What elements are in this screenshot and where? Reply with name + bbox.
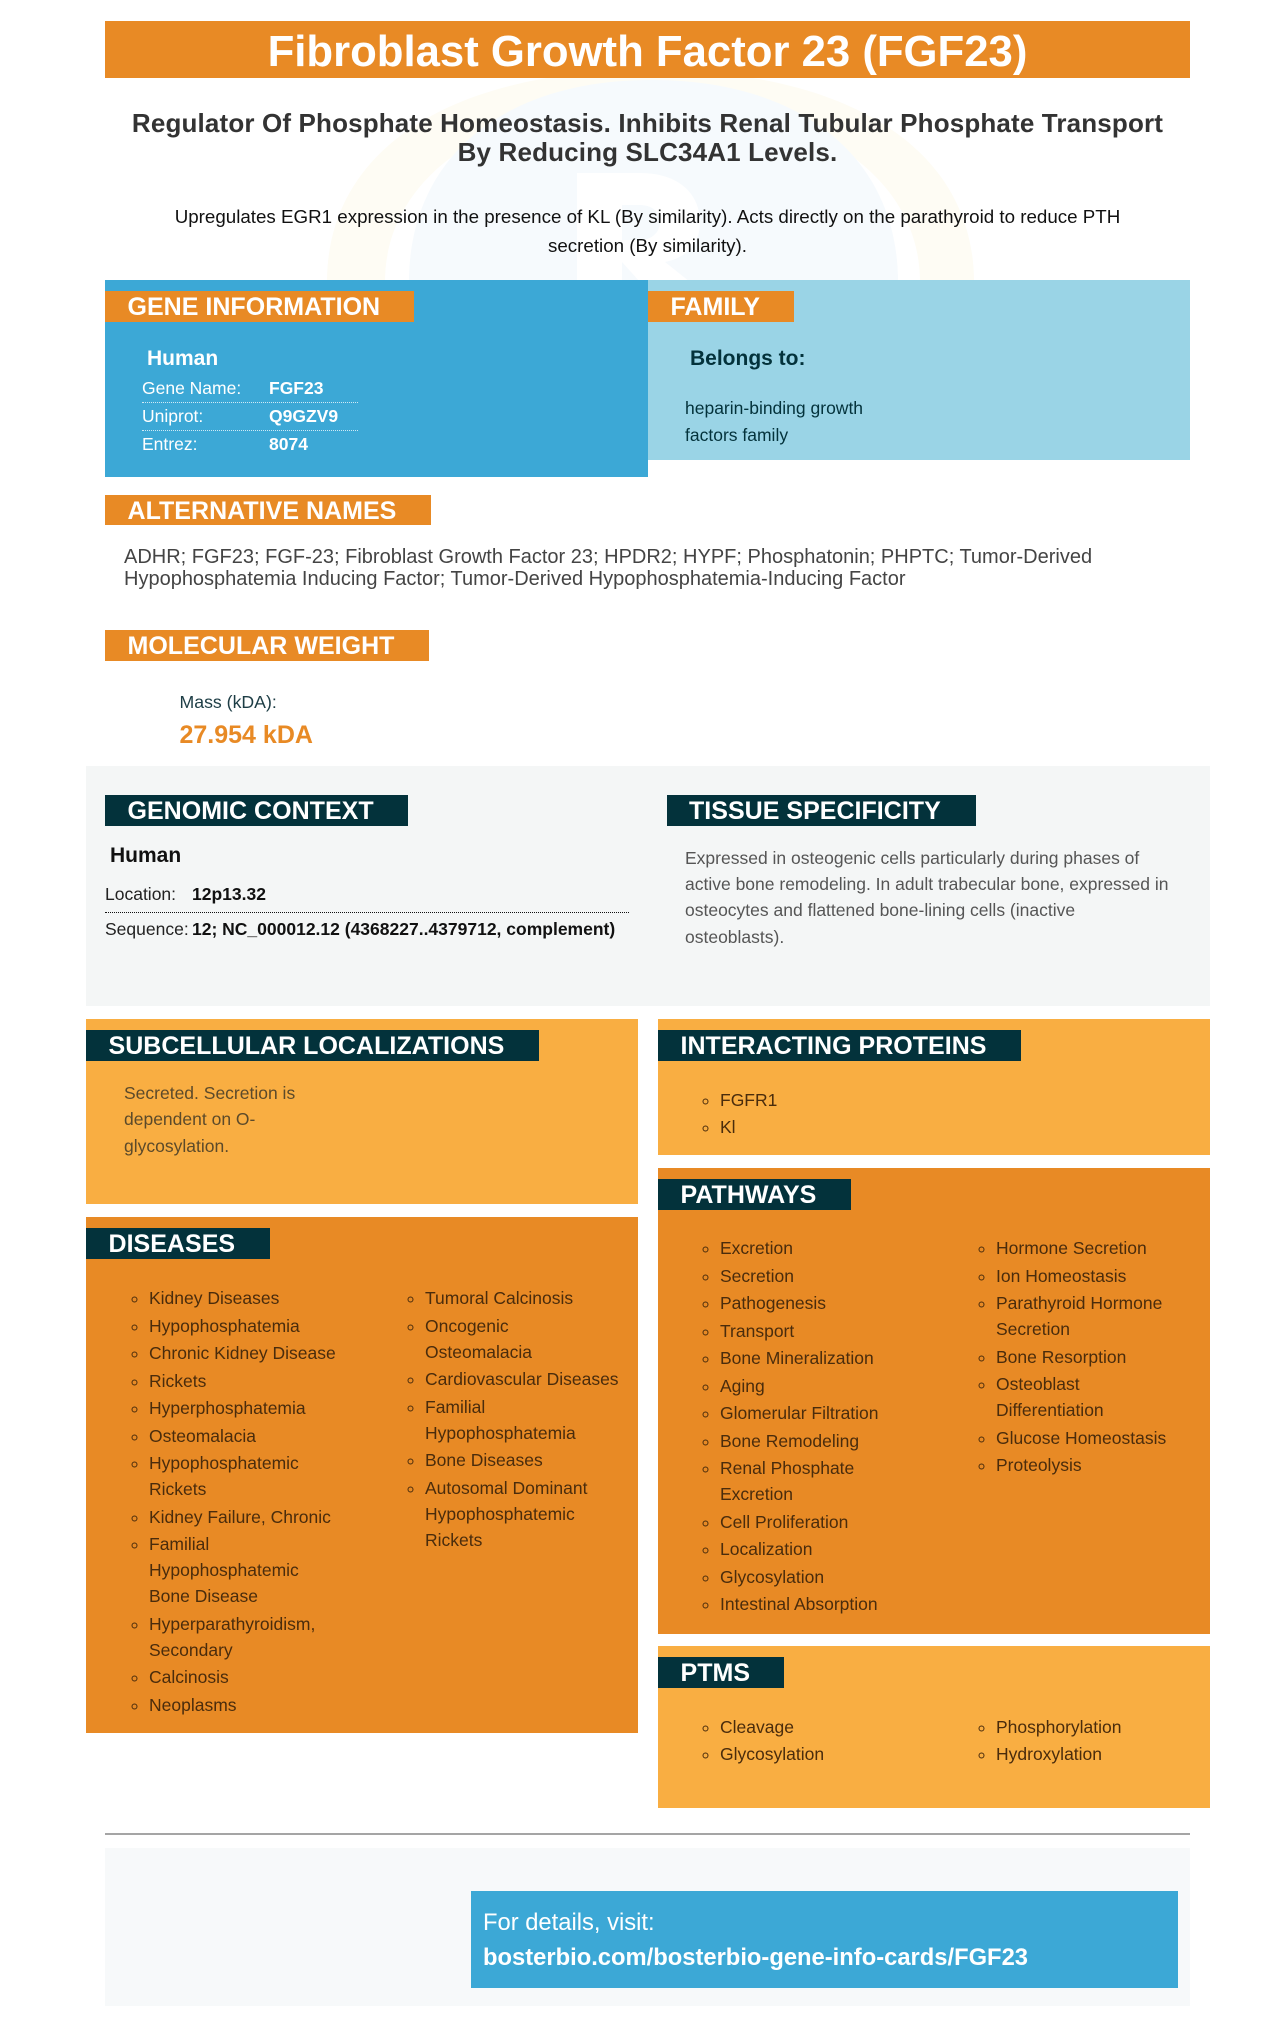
pathway list column 1: Glycosylation [720, 1567, 824, 1587]
entrez row [142, 434, 308, 454]
pathway list column 1: Renal Phosphate [720, 1458, 854, 1478]
disease list column 1: Neoplasms [149, 1694, 237, 1714]
disease list column 1: Kidney Diseases [149, 1288, 279, 1308]
alternative names text: ADHR; FGF23; FGF-23; Fibroblast Growth Factor 23; HPDR2; HYPF; Phosphatonin; PHPTC; Tumor-Derived [124, 546, 1092, 568]
pathway list column 1 [702, 1238, 879, 1614]
sequence row [105, 919, 615, 939]
pathway list column 2: Glucose Homeostasis [996, 1428, 1166, 1448]
protein list: FGFR1 [720, 1090, 777, 1110]
disease list column 2: Familial [425, 1396, 485, 1416]
heading: family: FAMILY [670, 293, 760, 321]
family text: factors family [685, 425, 788, 445]
disease list column 2: Hypophosphatemic [425, 1504, 575, 1524]
disease list column 1: Osteomalacia [149, 1426, 256, 1446]
description: Upregulates EGR1 expression in the presence of KL (By similarity). Acts directly on the parathyroid to reduce PTH [175, 206, 1120, 227]
disease list column 1: Hyperphosphatemia [149, 1398, 306, 1418]
panel: pathways [658, 1168, 1210, 1634]
heading: pathways [658, 1179, 851, 1210]
pathway list column 1: Transport [720, 1321, 794, 1341]
heading: diseases: DISEASES [108, 1230, 235, 1258]
disease list column 2: Osteomalacia [425, 1342, 532, 1362]
description [175, 206, 1120, 256]
title banner [105, 21, 1190, 78]
description: secretion (By similarity). [548, 235, 747, 256]
tissue specificity text: Expressed in osteogenic cells particularly during phases of [685, 848, 1139, 868]
watermark logo [327, 78, 974, 280]
family text [685, 398, 863, 445]
panel: interacting proteins [658, 1019, 1210, 1155]
subtitle: Regulator Of Phosphate Homeostasis. Inhibits Renal Tubular Phosphate Transport [132, 108, 1163, 138]
panel: gene information: 8074 [269, 434, 308, 454]
divider [142, 402, 358, 403]
heading: molecular weight: MOLECULAR WEIGHT [128, 632, 394, 660]
heading: family [648, 291, 794, 322]
call to action box [471, 1891, 1178, 1988]
pathway list column 1: Bone Remodeling [720, 1431, 859, 1451]
gene name row [142, 378, 323, 398]
pathway list column 1: Secretion [720, 1266, 794, 1286]
location row [105, 884, 266, 904]
pathway list column 2: Ion Homeostasis [996, 1266, 1126, 1286]
PTM list column 1: Cleavage [720, 1716, 794, 1736]
panel: diseases [86, 1217, 638, 1733]
disease list column 2: Bone Diseases [425, 1450, 543, 1470]
tissue specificity text [685, 848, 1168, 947]
PTM list column 2 [978, 1716, 1122, 1764]
disease list column 1: Bone Disease [149, 1586, 258, 1606]
tissue specificity text: active bone remodeling. In adult trabecular bone, expressed in [685, 874, 1168, 894]
pathway list column 2: Parathyroid Hormone [996, 1293, 1162, 1313]
mass value: 27.954 kDA [180, 721, 313, 749]
pathway list column 1: Pathogenesis [720, 1293, 826, 1313]
disease list column 1: Kidney Failure, Chronic [149, 1506, 331, 1526]
species label: Human [147, 346, 218, 370]
disease list column 1 [132, 1288, 336, 1714]
disease list column 1: Hypophosphatemic [149, 1560, 299, 1580]
heading: genomic context: GENOMIC CONTEXT [128, 797, 374, 825]
pathway list column 1: Cell Proliferation [720, 1512, 848, 1532]
panel: subcellular localizations [86, 1019, 638, 1204]
disease list column 2: Oncogenic [425, 1316, 509, 1336]
tissue specificity text: osteoblasts). [685, 927, 784, 947]
subcellular text: dependent on O- [124, 1109, 255, 1129]
mass label: Mass (kDA): [180, 692, 277, 712]
family text: heparin-binding growth [685, 398, 863, 418]
disease list column 1: Hypophosphatemia [149, 1316, 300, 1336]
disease list column 1: Secondary [149, 1640, 233, 1660]
entrez row: Entrez: [142, 434, 197, 454]
gene name row: Gene Name: [142, 378, 241, 398]
protein list: Kl [720, 1117, 736, 1137]
pathway list column 2: Bone Resorption [996, 1347, 1126, 1367]
pathway list column 2: Proteolysis [996, 1455, 1082, 1475]
PTM list column 1: Glycosylation [720, 1744, 824, 1764]
heading: alternative names: ALTERNATIVE NAMES [128, 497, 396, 525]
panel: family [648, 280, 1190, 460]
panel: gene information: FGF23 [269, 378, 323, 398]
protein list [702, 1090, 777, 1137]
subcellular text [124, 1082, 295, 1156]
disease list column 1: Calcinosis [149, 1667, 229, 1687]
pathway list column 1: Excretion [720, 1238, 793, 1258]
panel: gene information: Q9GZV9 [269, 406, 338, 426]
heading: interacting proteins: INTERACTING PROTEINS [680, 1032, 986, 1060]
pathway list column 1: Bone Mineralization [720, 1348, 874, 1368]
pathway list column 2: Osteoblast [996, 1374, 1080, 1394]
disease list column 2: Hypophosphatemia [425, 1422, 576, 1442]
heading: PTMs [658, 1657, 784, 1688]
disease list column 2 [408, 1288, 619, 1550]
subcellular text: Secreted. Secretion is [124, 1082, 295, 1102]
divider [142, 430, 358, 431]
location row: Location: [105, 884, 176, 904]
details link: bosterbio.com/bosterbio-gene-info-cards/FGF23 [483, 1944, 1028, 1971]
uniprot row: Uniprot: [142, 406, 203, 426]
heading: gene information: GENE INFORMATION [128, 293, 380, 321]
subtitle: By Reducing SLC34A1 Levels. [458, 137, 837, 167]
panel: gene information [105, 280, 648, 477]
pathway list column 1: Localization [720, 1539, 812, 1559]
tissue specificity text: osteocytes and flattened bone-lining cells (inactive [685, 900, 1075, 920]
disease list column 1: Chronic Kidney Disease [149, 1343, 336, 1363]
heading: subcellular localizations: SUBCELLULAR LOCALIZATIONS [108, 1032, 504, 1060]
panel: footer [105, 1848, 1190, 2006]
uniprot row [142, 406, 338, 426]
PTM list column 2: Phosphorylation [996, 1716, 1122, 1736]
panel: PTMs [658, 1646, 1210, 1808]
disease list column 1: Rickets [149, 1370, 206, 1390]
pathway list column 2: Differentiation [996, 1400, 1104, 1420]
subcellular text: glycosylation. [124, 1136, 229, 1156]
disease list column 1: Familial [149, 1534, 209, 1554]
details label: For details, visit: [483, 1909, 655, 1936]
disease list column 1: Hypophosphatemic [149, 1453, 299, 1473]
pathway list column 1: Glomerular Filtration [720, 1403, 879, 1423]
panel: genomic context and tissue specificity: 12; NC_000012.12 (4368227..4379712, complement) [192, 919, 615, 939]
heading: pathways: PATHWAYS [680, 1181, 816, 1209]
pathway list column 1: Aging [720, 1376, 765, 1396]
PTM list column 2: Hydroxylation [996, 1744, 1102, 1764]
disease list column 2: Tumoral Calcinosis [425, 1288, 573, 1308]
pathway list column 2: Secretion [996, 1319, 1070, 1339]
divider [105, 912, 629, 913]
pathway list column 1: Intestinal Absorption [720, 1594, 878, 1614]
pathway list column 2 [978, 1238, 1166, 1475]
disease list column 2: Cardiovascular Diseases [425, 1369, 619, 1389]
pathway list column 2: Hormone Secretion [996, 1238, 1147, 1258]
disease list column 1: Hyperparathyroidism, [149, 1614, 315, 1634]
species label: Human [110, 844, 181, 867]
pathway list column 1: Excretion [720, 1484, 793, 1504]
subtitle [132, 108, 1163, 167]
alternative names text [124, 546, 1092, 590]
PTM list column 1 [702, 1716, 824, 1764]
title banner: Fibroblast Growth Factor 23 (FGF23) [268, 27, 1027, 76]
panel: genomic context and tissue specificity: 12p13.32 [192, 884, 266, 904]
heading: tissue specificity: TISSUE SPECIFICITY [689, 797, 941, 825]
panel: genomic context and tissue specificity [86, 766, 1210, 1006]
disease list column 2: Autosomal Dominant [425, 1478, 587, 1498]
heading: diseases [86, 1228, 270, 1259]
alternative names text: Hypophosphatemia Inducing Factor; Tumor-Derived Hypophosphatemia-Inducing Factor [124, 568, 906, 590]
sequence row: Sequence: [105, 919, 189, 939]
disease list column 1: Rickets [149, 1479, 206, 1499]
heading: PTMs: PTMS [680, 1659, 750, 1687]
disease list column 2: Rickets [425, 1530, 482, 1550]
belongs to label: Belongs to: [690, 346, 806, 370]
